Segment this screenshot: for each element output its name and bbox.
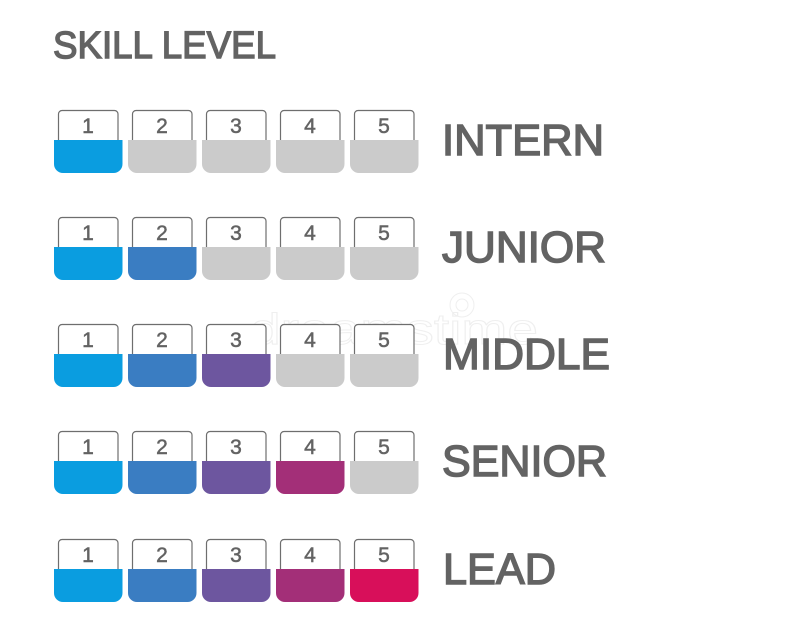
- level tabs and fills: junior: 1: [82, 222, 94, 245]
- level tabs and fills: intern: [54, 110, 418, 173]
- row: senior: [54, 432, 607, 494]
- title: SKILL LEVEL: [53, 25, 276, 67]
- level tabs and fills: middle: 5: [378, 329, 390, 352]
- level tabs and fills: intern: 4: [304, 115, 316, 138]
- level tabs and fills: junior: 5: [378, 222, 390, 245]
- level tabs and fills: lead: 5: [378, 544, 390, 567]
- level tabs and fills: senior: 2: [156, 436, 168, 459]
- label: lead: LEAD: [443, 545, 556, 594]
- level tabs and fills: middle: 2: [156, 329, 168, 352]
- level tabs and fills: senior: 3: [230, 436, 242, 459]
- level tabs and fills: intern: 1: [82, 115, 94, 138]
- row: intern: [54, 110, 604, 173]
- label: middle: MIDDLE: [443, 330, 610, 379]
- row: junior: [54, 218, 606, 280]
- watermark: dreamstime: [250, 305, 538, 354]
- level tabs and fills: middle: 3: [230, 329, 242, 352]
- level tabs and fills: junior: 2: [156, 222, 168, 245]
- row: lead: [54, 540, 556, 602]
- level tabs and fills: intern: 2: [156, 115, 168, 138]
- level tabs and fills: middle: [54, 324, 418, 387]
- level tabs and fills: lead: 3: [230, 544, 242, 567]
- level tabs and fills: senior: 1: [82, 436, 94, 459]
- level tabs and fills: junior: 3: [230, 222, 242, 245]
- level tabs and fills: lead: 1: [82, 544, 94, 567]
- level tabs and fills: senior: 5: [378, 436, 390, 459]
- level tabs and fills: middle: 1: [82, 329, 94, 352]
- label: junior: JUNIOR: [442, 223, 606, 272]
- level tabs and fills: lead: 4: [304, 544, 316, 567]
- level tabs and fills: junior: 4: [304, 222, 316, 245]
- label: intern: INTERN: [442, 116, 604, 165]
- level tabs and fills: intern: 3: [230, 115, 242, 138]
- level tabs and fills: junior: [54, 218, 418, 280]
- level tabs and fills: intern: 5: [378, 115, 390, 138]
- level tabs and fills: middle: 4: [304, 329, 316, 352]
- level tabs and fills: senior: [54, 432, 418, 494]
- watermark: [250, 293, 538, 354]
- level tabs and fills: lead: [54, 540, 418, 602]
- label: senior: SENIOR: [442, 437, 607, 486]
- level tabs and fills: senior: 4: [304, 436, 316, 459]
- level tabs and fills: lead: 2: [156, 544, 168, 567]
- row: middle: [54, 324, 610, 387]
